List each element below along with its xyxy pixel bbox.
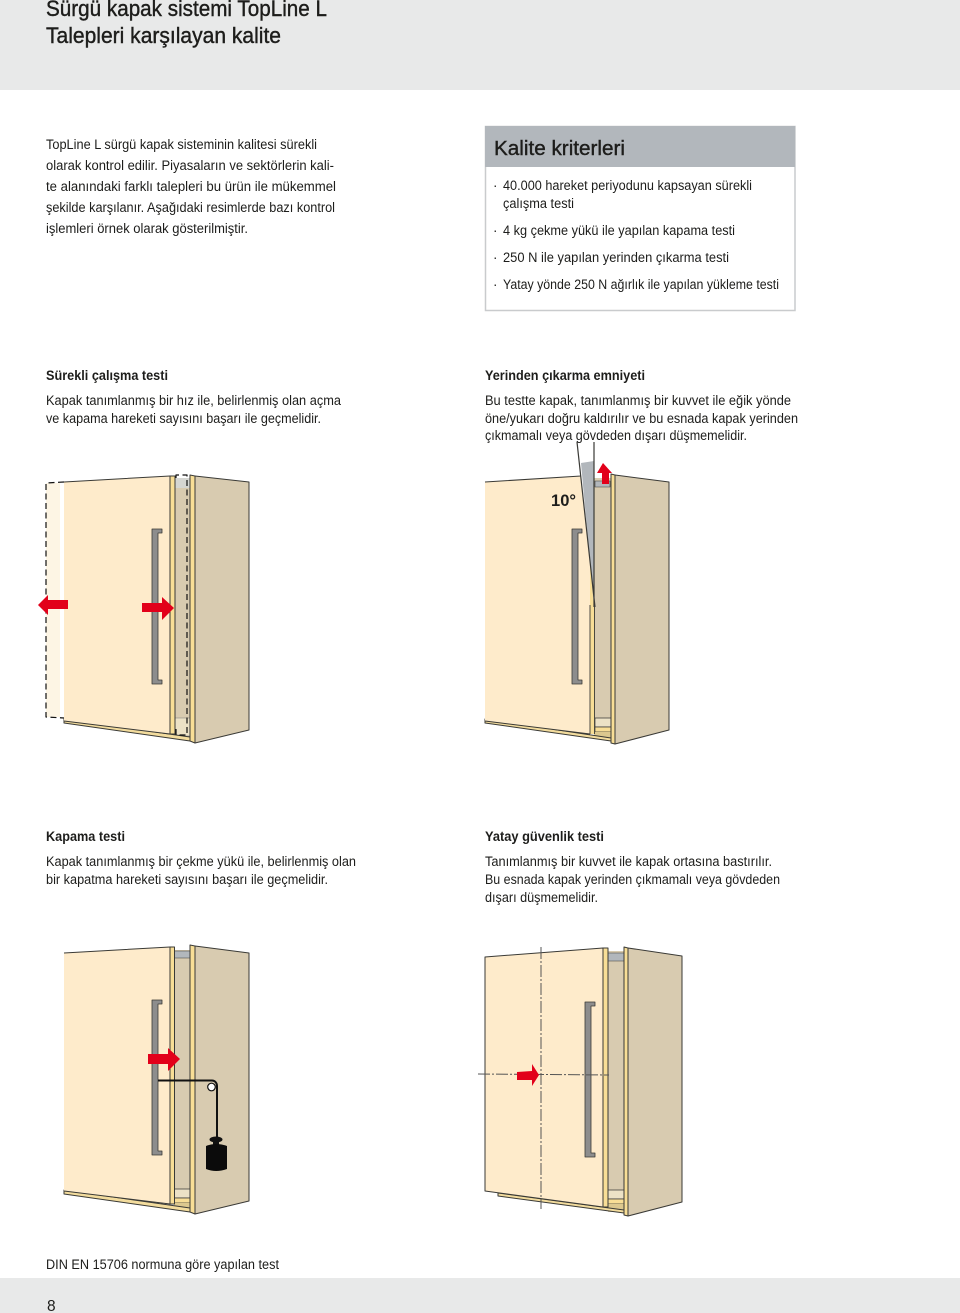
tilt wedge bbox=[581, 461, 594, 607]
angle label: 10° bbox=[551, 491, 576, 510]
section text: lift-out safety bbox=[485, 368, 798, 443]
section text: continuous operation test: Sürekli çalışma testi bbox=[46, 368, 168, 383]
criteria list: · bbox=[493, 178, 498, 193]
panel heading: Kalite kriterleri bbox=[494, 137, 625, 160]
handle bbox=[152, 529, 162, 684]
handle bbox=[152, 1000, 162, 1155]
intro text bbox=[46, 137, 336, 236]
standard note: DIN EN 15706 normuna göre yapılan test bbox=[46, 1257, 279, 1272]
section text: horizontal safety test: Bu esnada kapak yerinden çıkmamalı veya gövdeden bbox=[485, 872, 780, 887]
section text: closing test bbox=[46, 829, 356, 887]
title: Talepleri karşılayan kalite bbox=[46, 23, 281, 48]
criteria list: 4 kg çekme yükü ile yapılan kapama testi bbox=[503, 223, 735, 238]
section text: closing test: bir kapatma hareketi sayısını başarı ile geçmelidir. bbox=[46, 872, 328, 887]
criteria list: · bbox=[493, 223, 498, 238]
criteria list: çalışma testi bbox=[503, 196, 574, 211]
illustration: cabinet with sliding door motion bbox=[38, 475, 249, 743]
center lines bbox=[478, 947, 609, 1209]
criteria list bbox=[493, 178, 779, 292]
weight on pulley bbox=[158, 1080, 227, 1171]
intro text: işlemleri örnek olarak gösterilmiştir. bbox=[46, 221, 248, 236]
intro text: te alanındaki farklı talepleri bu ürün ile mükemmel bbox=[46, 179, 336, 194]
arrow: right bbox=[148, 1048, 180, 1071]
illustration: lift-out test with 10 degree tilt bbox=[485, 442, 669, 744]
section text: horizontal safety test: Yatay güvenlik testi bbox=[485, 829, 604, 844]
section text: continuous operation test: Kapak tanımlanmış bir hız ile, belirlenmiş olan açma bbox=[46, 393, 341, 408]
arrow: right bbox=[142, 597, 174, 620]
section text: lift-out safety: çıkmamalı veya gövdeden dışarı düşmemelidir. bbox=[485, 428, 747, 443]
section text: lift-out safety: öne/yukarı doğru kaldırılır ve bu esnada kapak yerinden bbox=[485, 411, 798, 426]
section text: lift-out safety: Bu testte kapak, tanımlanmış bir kuvvet ile eğik yönde bbox=[485, 393, 791, 408]
section text: continuous operation test: ve kapama hareketi sayısını başarı ile geçmelidir. bbox=[46, 411, 321, 426]
section text: closing test: Kapama testi bbox=[46, 829, 125, 844]
handle bbox=[572, 529, 582, 684]
criteria list: 250 N ile yapılan yerinden çıkarma testi bbox=[503, 250, 729, 265]
section text: lift-out safety: Yerinden çıkarma emniyeti bbox=[485, 368, 645, 383]
intro text: TopLine L sürgü kapak sisteminin kalitesi sürekli bbox=[46, 137, 317, 152]
illustration: closing test with weight bbox=[64, 945, 249, 1214]
header band bbox=[0, 0, 960, 90]
section text: closing test: Kapak tanımlanmış bir çekme yükü ile, belirlenmiş olan bbox=[46, 854, 356, 869]
criteria list: Yatay yönde 250 N ağırlık ile yapılan yükleme testi bbox=[503, 277, 779, 292]
dashed door outline bbox=[46, 475, 187, 735]
section text: continuous operation test bbox=[46, 368, 341, 426]
handle bbox=[585, 1002, 595, 1157]
section text: horizontal safety test: Tanımlanmış bir kuvvet ile kapak ortasına bastırılır. bbox=[485, 854, 772, 869]
intro text: olarak kontrol edilir. Piyasaların ve sektörlerin kali- bbox=[46, 158, 334, 173]
criteria list: · bbox=[493, 250, 498, 265]
section text: horizontal safety test: dışarı düşmemelidir. bbox=[485, 890, 598, 905]
illustration: horizontal load test bbox=[478, 947, 682, 1216]
panel: quality criteria bbox=[485, 126, 795, 310]
footer band bbox=[0, 1278, 960, 1313]
criteria list: · bbox=[493, 277, 498, 292]
arrow: right bbox=[517, 1064, 539, 1086]
criteria list: 40.000 hareket periyodunu kapsayan sürekli bbox=[503, 178, 752, 193]
arrow: up bbox=[597, 463, 612, 484]
arrow: left bbox=[38, 595, 68, 615]
section text: horizontal safety test bbox=[485, 829, 780, 905]
intro text: şekilde karşılanır. Aşağıdaki resimlerde bazı kontrol bbox=[46, 200, 335, 215]
title bbox=[46, 0, 327, 48]
